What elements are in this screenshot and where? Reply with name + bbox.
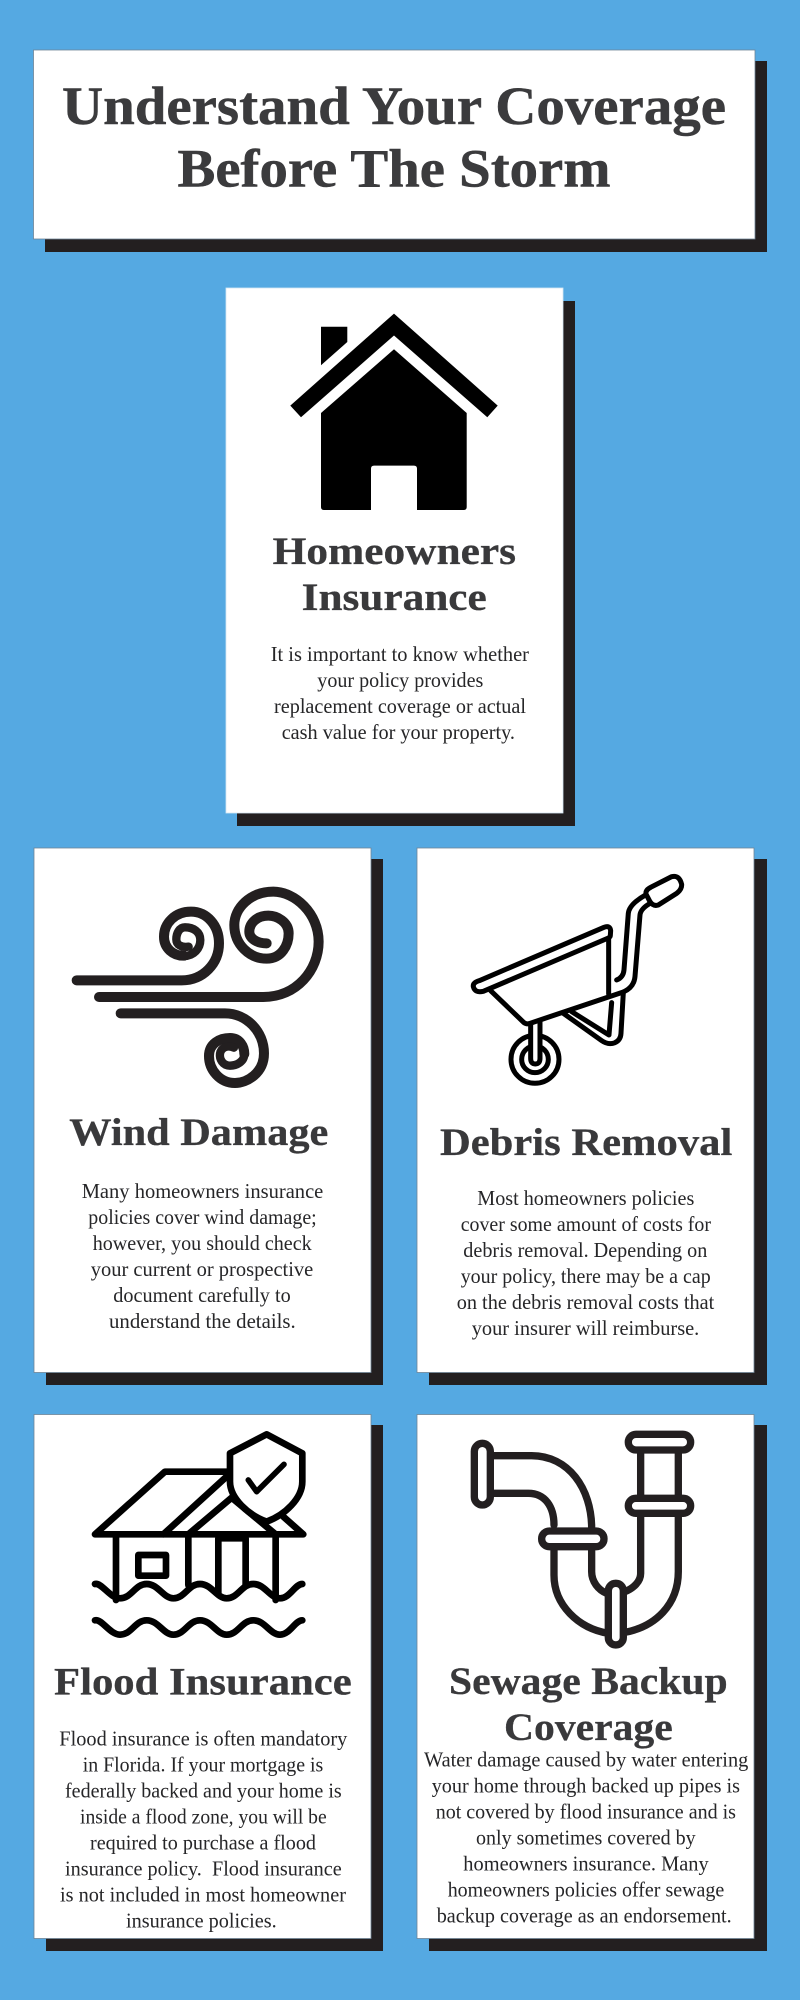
heading: debris removal: Debris Removal [440,1121,732,1164]
text: sewage backup body: Water damage caused by water entering [424,1748,749,1772]
text: sewage backup body [424,1748,749,1928]
text: flood insurance body: federally backed and your home is [65,1778,342,1802]
text: homeowners insurance body: It is important to know whether [271,642,529,666]
heading: flood insurance: Flood Insurance [54,1660,352,1704]
text: wind damage body: Many homeowners insurance [82,1179,323,1203]
icon: flooded house with shield [95,1434,303,1635]
text: debris removal body: your insurer will reimburse. [472,1316,699,1340]
text: flood insurance body: required to purchase a flood [90,1830,316,1854]
panel: debris removal [417,848,767,1385]
icon: drain pipe [474,1434,691,1645]
title: Before The Storm [178,138,611,198]
text: debris removal body: Most homeowners policies [477,1186,694,1210]
heading: homeowners insurance [273,530,516,619]
text: sewage backup body: only sometimes covered by [476,1826,696,1850]
panel: flood insurance [34,1414,383,1951]
heading: homeowners insurance: Insurance [302,576,487,619]
text: flood insurance body [59,1726,348,1932]
text: wind damage body: however, you should check [93,1231,312,1255]
text: debris removal body: debris removal. Depending on [463,1238,708,1262]
text: sewage backup body: backup coverage as an endorsement. [437,1904,732,1928]
text: debris removal body [457,1186,714,1340]
icon: wind [77,892,319,1083]
text: wind damage body: document carefully to [113,1283,291,1307]
text: sewage backup body: homeowners policies offer sewage [448,1878,724,1902]
text: wind damage body [82,1179,323,1333]
text: wind damage body: policies cover wind damage; [88,1205,317,1229]
text: sewage backup body: your home through backed up pipes is [432,1774,740,1798]
text: debris removal body: on the debris removal costs that [457,1290,714,1314]
text: debris removal body: cover some amount of costs for [461,1212,711,1236]
text: homeowners insurance body: your policy provides [317,668,483,692]
text: homeowners insurance body [271,642,529,744]
text: homeowners insurance body: cash value for your property. [282,720,515,744]
panel: homeowners insurance [226,288,575,826]
heading: homeowners insurance: Homeowners [273,530,516,573]
heading: sewage backup coverage [449,1660,728,1749]
text: flood insurance body: insurance policies. [126,1908,277,1932]
text: flood insurance body: Flood insurance is often mandatory [59,1726,348,1750]
icon: wheelbarrow [473,876,682,1083]
text: homeowners insurance body: replacement coverage or actual [274,694,526,718]
panel: sewage backup coverage [417,1414,767,1951]
text: flood insurance body: inside a flood zone, you will be [80,1804,327,1828]
text: wind damage body: understand the details. [109,1309,296,1333]
text: wind damage body: your current or prospective [91,1257,313,1281]
text: flood insurance body: insurance policy. Flood insurance [65,1856,342,1880]
heading: sewage backup coverage: Sewage Backup [449,1660,728,1703]
heading: wind damage: Wind Damage [69,1111,328,1154]
title: Understand Your Coverage [62,76,726,136]
panel: wind damage [34,848,383,1385]
text: flood insurance body: in Florida. If your mortgage is [83,1752,323,1776]
heading: sewage backup coverage: Coverage [504,1706,673,1749]
panel: title [34,50,767,252]
text: sewage backup body: not covered by flood insurance and is [436,1800,736,1824]
title [62,76,726,198]
text: flood insurance body: is not included in most homeowner [60,1882,346,1906]
icon: house [290,314,498,510]
text: sewage backup body: homeowners insurance. Many [463,1852,709,1876]
text: debris removal body: your policy, there may be a cap [461,1264,711,1288]
